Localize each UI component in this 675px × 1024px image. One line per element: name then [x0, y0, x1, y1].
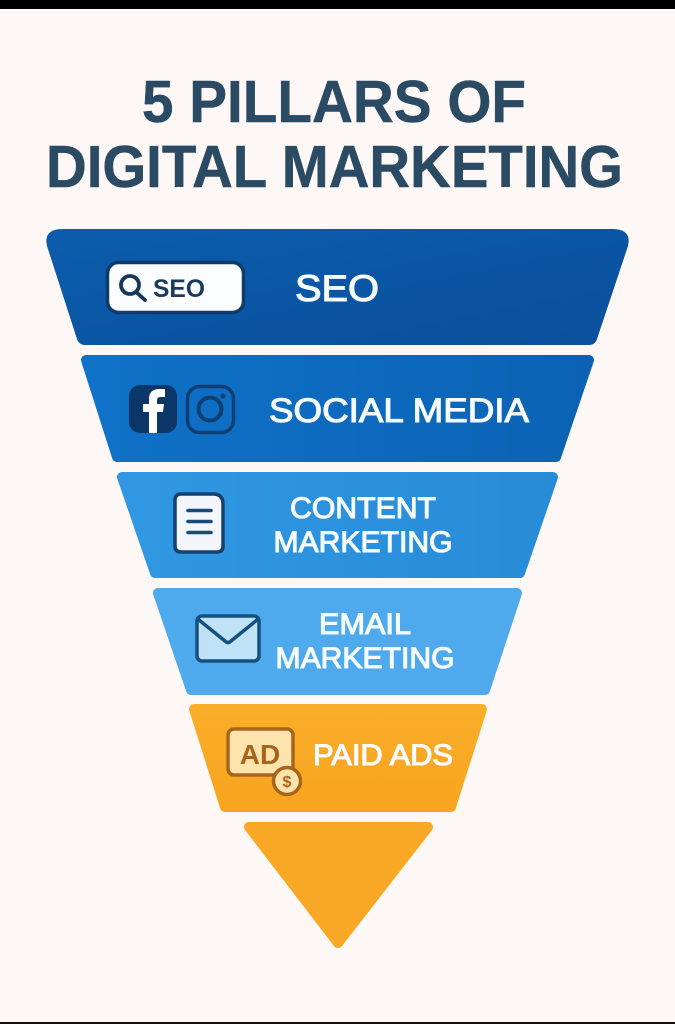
label: content marketing: MARKETING — [274, 526, 452, 559]
icon: AD badge with coin — [228, 729, 300, 794]
icon: document — [175, 494, 223, 552]
title: DIGITAL MARKETING — [46, 134, 623, 200]
label: SEO: SEO — [295, 268, 379, 309]
panel: paid ads — [194, 709, 482, 807]
icon: instagram — [188, 386, 234, 432]
title: 5 PILLARS OF — [142, 69, 526, 135]
panel: email marketing — [158, 593, 517, 690]
label: paid ads: PAID ADS — [313, 739, 453, 772]
title — [46, 69, 623, 200]
label: content marketing: CONTENT — [290, 492, 436, 525]
funnel tip triangle — [249, 827, 428, 943]
icon: AD badge with coin: AD — [240, 739, 280, 770]
panel: content marketing — [122, 477, 553, 573]
label: content marketing — [274, 492, 452, 559]
icon: SEO search bar — [108, 262, 244, 312]
icon: AD badge with coin: $ — [283, 774, 292, 791]
label: email marketing: EMAIL — [319, 608, 411, 641]
label: social media: SOCIAL MEDIA — [269, 392, 529, 430]
panel: social media — [86, 360, 589, 457]
label: email marketing — [276, 608, 454, 675]
label: email marketing: MARKETING — [276, 642, 454, 675]
icon: SEO search bar: SEO — [153, 275, 205, 303]
icon: facebook — [129, 385, 177, 433]
icon: envelope — [197, 616, 259, 661]
panel: SEO — [46, 229, 629, 345]
